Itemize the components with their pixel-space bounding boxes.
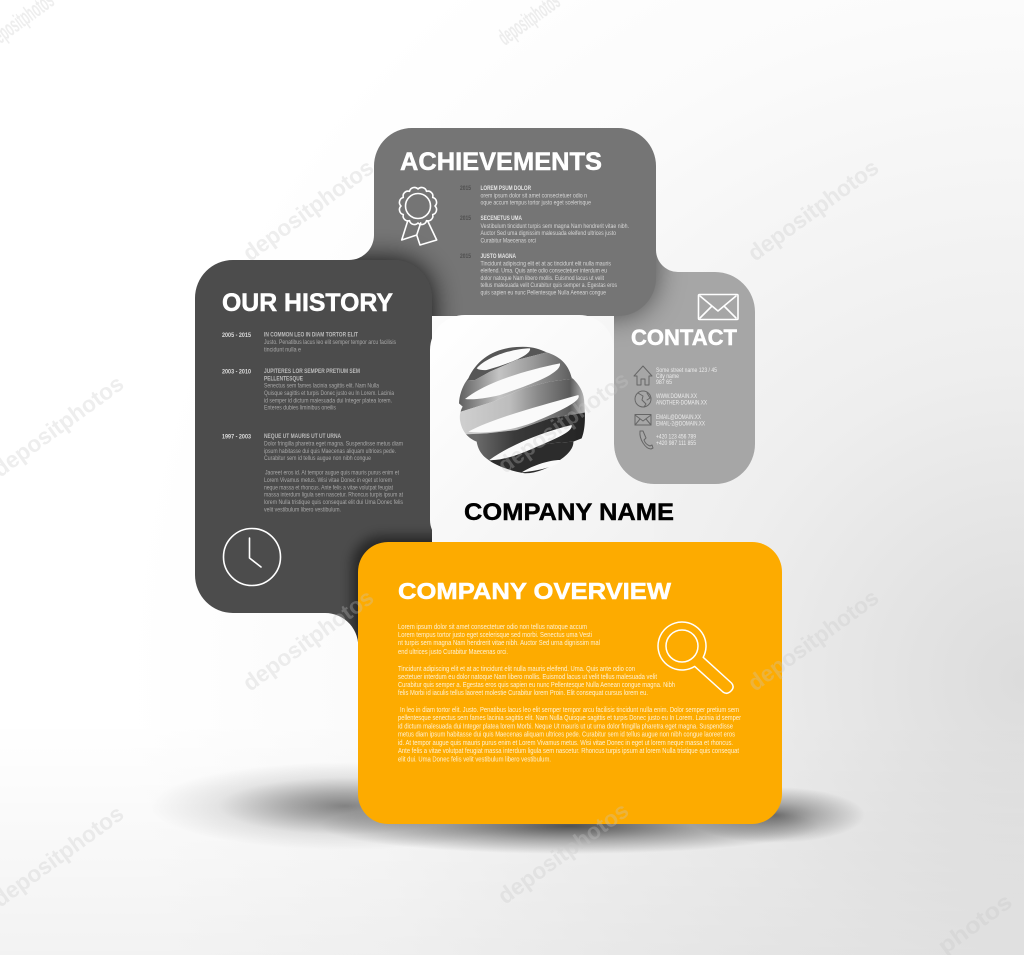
overview text: paragraph 3: Ante felis a vitae volutpat feugiat massa interdum ligula sem nascetur. Rhoncus turpis ipsum at lorem Nulla tristique quis consequat: [398, 748, 739, 755]
history entries: lorem Nulla tristique quis consequat elit dui Uma Donec felis: [264, 499, 404, 506]
achievement entries: quis sapien eu nunc Pellentesque Nulla Aenean congue: [480, 290, 606, 296]
heading: contact: CONTACT: [631, 325, 738, 350]
heading: company name: COMPANY NAME: [464, 499, 674, 526]
overview text: paragraph 3: elit dui. Uma Donec felis velit vestibulum libero vestibulum.: [398, 756, 551, 764]
achievement years: 2015: [460, 185, 471, 192]
history years: 2003 - 2010: [222, 368, 251, 376]
overview text: paragraph 3: id. At tempor augue quis mauris purus enim et Lorem Vivamus metus. Wisi vitae Donec in eget ut lorem neque massa et rhoncus.: [398, 740, 733, 747]
history entries: ipsum habitasse dui quis Maecenas aliquam ultrices pede.: [264, 448, 396, 455]
overview text: paragraph 3: [398, 707, 742, 764]
phone text: +420 123 456 789: [656, 434, 696, 440]
history entries: JUPITERES LOR SEMPER PRETIUM SEM: [264, 368, 360, 375]
address text: 987 65: [656, 379, 672, 386]
history entries: Lorem Vivamus metus. Wisi vitae Donec in eget ut lorem: [264, 477, 392, 484]
history entries: massa interdum ligula sem nascetur. Rhoncus turpis ipsum at: [264, 492, 403, 498]
achievement entries: Vestibulum tincidunt turpis sem magna Nam hendrerit vitae nibh.: [480, 223, 629, 230]
overview text: paragraph 1: Lorem ipsum dolor sit amet consectetuer odio non tellus natoque accum: [398, 624, 587, 631]
overview text: paragraph 1: nt turpis sem magna Nam hendrerit vitae nibh. Auctor Sed urna dignissim mal: [398, 640, 600, 647]
heading: achievements: ACHIEVEMENTS: [400, 148, 602, 176]
overview text: paragraph 3: In leo in diam tortor elit. Justo. Penatibus lacus leo elit semper tempor arcu facilisis tincidunt nulla enim. Dolor semper pretium sem: [400, 707, 739, 714]
achievement years: 2015: [460, 215, 471, 222]
icon: contact envelope: [698, 294, 738, 320]
history entries: Senectus sem fames lacinia sagittis elit. Nam Nulla: [264, 382, 379, 390]
web text: [656, 393, 707, 406]
overview text: paragraph 2: Tincidunt adipiscing elit et at ac tincidunt elit nulla mauris eleifend. Uma. Quis ante odio con: [398, 666, 635, 673]
overview text: paragraph 1: [398, 624, 600, 656]
panel: contact: [614, 250, 755, 484]
achievement years: 2015: [460, 253, 471, 260]
overview text: paragraph 2: Curabitur quis semper a. Egestas eros quis sapien eu nunc Pellentesque Nulla Aenean congue magna. Nibh: [398, 682, 675, 689]
web text: ANOTHER-DOMAIN.XX: [656, 400, 707, 406]
achievement entries: Tincidunt adipiscing elit et at ac tincidunt elit nulla mauris: [480, 260, 612, 268]
watermarks: depositphotos: [493, 366, 633, 478]
email text: [656, 414, 705, 428]
icon: small envelope: [635, 414, 651, 425]
achievement entries: SECENETUS UMA: [480, 215, 522, 222]
email text: EMAIL@DOMAIN.XX: [656, 414, 701, 421]
history entries: Quisque sagittis et turpis Donec justo eu In Lorem. Lacinia: [264, 390, 394, 397]
history entries: Dolor fringilla pharetra eget magna. Suspendisse metus diam: [264, 440, 403, 448]
overview text: paragraph 1: Lorem tempus tortor justo eget scelerisque sed morbi. Senectus uma Vesti: [398, 632, 592, 639]
history years: 1997 - 2003: [222, 434, 251, 440]
overview text: paragraph 3: id dictum malesuada dui Integer platea lorem Morbi. Neque Ut mauris ut ut urna dolor fringilla pharetra eget magna. Suspendisse: [398, 724, 733, 730]
achievement entries: oque accum tempus tortor justo eget scelerisque: [480, 200, 591, 206]
overview text: paragraph 2: [398, 666, 675, 697]
achievement entries: orem ipsum dolor sit amet consectetuer odio n: [480, 192, 587, 200]
email text: EMAIL-2@DOMAIN.XX: [656, 420, 705, 428]
icon: phone: [640, 431, 653, 449]
history entries: Justo. Penatibus lacus leo elit semper tempor arcu facilisis: [264, 339, 397, 346]
panel: our history: [195, 260, 432, 642]
web text: WWW.DOMAIN.XX: [656, 393, 697, 400]
history entries: NEQUE UT MAURIS UT UT URNA: [264, 433, 341, 440]
achievement entries: Curabitur Maecenas orci: [480, 238, 536, 244]
overview text: paragraph 1: end ultrices justo Curabitur Maecenas orci.: [398, 649, 508, 656]
history entries: [264, 332, 404, 514]
achievement entries: tellus malesuada velit Curabitur quis semper a. Egestas eros: [480, 282, 618, 289]
history entries: velit vestibulum libero vestibulum.: [264, 506, 341, 514]
panel: company logo card: [430, 315, 674, 545]
overview text: paragraph 3: metus diam ipsum habitasse dui quis Maecenas aliquam ultrices pede. Curabitur sem id tellus augue non nibh congue laoreet eros: [398, 732, 735, 738]
history entries: neque massa et rhoncus. Ante felis a vitae volutpat feugiat: [264, 484, 393, 492]
history entries: id semper id dictum malesuada dui Integer platea lorem.: [264, 398, 392, 404]
phone text: [656, 434, 696, 447]
history entries: Enteres dubies liminibus oneilis: [264, 404, 337, 412]
achievement entries: Auctor Sed uma dignissim malesuada eleifend ultrices justo: [480, 230, 616, 237]
panel: company overview: [358, 542, 782, 824]
icon: award ribbon: [399, 187, 437, 245]
heading: company overview: COMPANY OVERVIEW: [398, 578, 671, 604]
icon: globe: [635, 391, 651, 407]
phone text: +420 987 111 855: [656, 440, 696, 447]
panel: achievements: [350, 128, 656, 316]
heading: our history: OUR HISTORY: [222, 289, 393, 317]
floor shadow: [150, 762, 865, 854]
overview text: paragraph 3: pellentesque senectus sem fames lacinia sagittis elit. Nam Nulla Quisque sagittis et turpis Donec justo eu In Lorem. Lacinia id semper: [398, 715, 742, 722]
achievement entries: dolor natoque Nam libero mollis. Euismod lacus ut velit: [480, 275, 604, 282]
watermarks: depositphotos: [493, 797, 633, 909]
history years: [222, 332, 251, 440]
watermarks: depositphotos: [238, 584, 378, 696]
history entries: IN COMMON LEO IN DIAM TORTOR ELIT: [264, 332, 358, 338]
history entries: tincidunt nulla e: [264, 346, 301, 354]
icon: clock: [224, 528, 280, 586]
icon: magnifier: [658, 622, 733, 693]
history entries: PELLENTESQUE: [264, 376, 303, 382]
achievement entries: LOREM PSUM DOLOR: [480, 185, 531, 192]
history years: 2005 - 2015: [222, 332, 251, 339]
achievement entries: eleifend. Uma. Quis ante odio consectetuer interdum eu: [480, 268, 607, 274]
overview text: paragraph 2: felis Morbi id iaculis tellus laoreet molestie Curabitur lorem Proin. Elit consequat cursus lorem eu.: [398, 690, 648, 697]
watermarks: depositphotos: [743, 584, 883, 696]
watermarks: depositphotos: [743, 154, 883, 266]
achievement entries: [480, 185, 629, 296]
achievement entries: JUSTO MAGNA: [480, 253, 516, 260]
history entries: Curabitur sem id tellus augue non nibh congue: [264, 455, 371, 462]
address text: Some street name 123 / 45: [656, 367, 717, 374]
achievement years: [460, 185, 471, 260]
overview text: paragraph 2: sectetuer interdum eu dolor natoque Nam libero mollis. Euismod lacus ut velit tellus malesuada velit: [398, 674, 657, 681]
watermarks: depositphotos: [238, 154, 378, 266]
icon: house: [634, 366, 652, 385]
history entries: Jaoreet eros id. At tempor augue quis mauris purus enim et: [265, 470, 399, 476]
address text: [656, 367, 717, 386]
icon: striped globe logo: [459, 346, 585, 474]
address text: City name: [656, 373, 679, 380]
